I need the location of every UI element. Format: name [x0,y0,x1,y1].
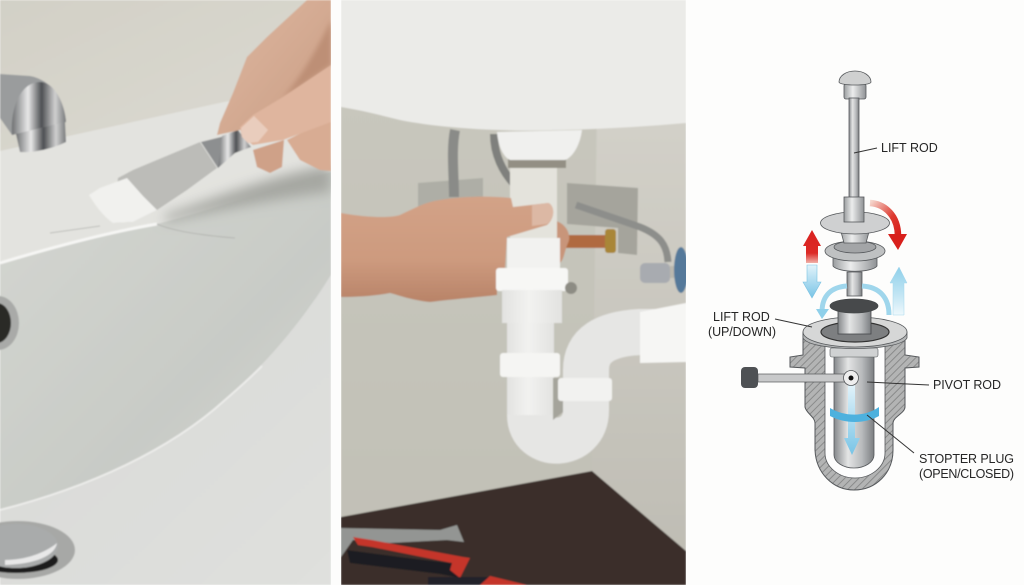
icon: white filler on blade [89,178,157,223]
S trap bend [530,332,686,441]
icon: knife bolster [200,136,222,168]
label: pivot rod: PIVOT ROD [933,378,1001,392]
label: lift rod up/down: LIFT ROD [713,310,770,324]
pivot rod leader [867,382,929,385]
counter top [0,102,330,262]
copper pipe [560,235,608,248]
stopper plug leader [867,415,914,453]
braided supply hose two [494,134,514,184]
panel: pop-up stopper diagram [708,71,1014,490]
tail pipe [510,165,557,245]
shutoff valve [640,247,688,293]
icon: pop-up drain [0,521,75,579]
arrow: red rotation [870,203,907,250]
arrow: blue down [803,265,821,298]
collar [507,238,560,270]
tools on cabinet floor [341,525,527,585]
arrow: blue flow arcs [816,286,889,319]
icon: stopper head assembly [820,197,890,296]
upper slip nut [496,268,568,291]
icon: pivot rod [741,367,858,388]
shadow of hand on sink [165,165,331,222]
panel: sink crack repair photo [0,0,331,585]
icon: overflow hole [0,296,19,350]
label: lift rod up/down: (UP/DOWN) [708,325,776,339]
right mounting bracket [567,183,638,255]
icon: stopper top cap [830,299,878,334]
lower sink rim [0,275,331,585]
label: stopper plug [919,452,1014,481]
arrow: red up [803,230,821,263]
basin bowl [0,172,331,510]
upper body [502,290,562,323]
plug shoulder [830,348,878,357]
icon: lift rod shaft [849,98,859,200]
side wall right [592,100,686,552]
icon: putty knife blade [117,142,217,210]
brass fitting [605,229,616,253]
icon: chrome faucet [0,74,66,152]
braided supply hose three [576,205,668,262]
wall behind sink [0,0,306,152]
lift rod up/down leader [775,319,812,327]
icon: blue seal band [830,407,879,422]
lift rod leader [854,148,877,153]
arm coupling [640,303,686,363]
hand gripping pipe [341,197,553,302]
label: stopper plug: (OPEN/CLOSED) [919,467,1014,481]
hand holding the knife [217,0,331,173]
icon: stopper plug [834,352,874,468]
icon: lift rod knob [839,71,871,99]
rim highlights [0,224,157,263]
drain silver ring [508,157,566,168]
arrow: blue up [890,267,907,315]
trap gap shadow [553,378,563,420]
middle slip nut [500,353,560,377]
sink bowl underside [341,0,686,131]
braided hoses [453,130,455,197]
label: lift rod up/down [708,310,776,339]
icon: top flange [803,317,907,348]
trap slip nut [558,378,612,401]
white vertical pipe [506,322,554,414]
left mounting bracket [418,178,483,207]
wall screw [565,282,577,294]
dark cabinet floor [341,471,686,585]
drain flange [497,130,582,160]
icon: knife handle [218,130,251,168]
panel: under-sink plumbing photo [341,0,688,585]
icon: drain body cross-section [790,333,919,490]
label: stopper plug: STOPTER PLUG [919,452,1014,466]
fingers behind pipe [556,221,570,262]
label: lift rod: LIFT ROD [881,141,938,155]
arrow: blue flow through plug [844,385,860,455]
crack lines [50,224,235,238]
drain body cavity [825,345,885,478]
back wall [341,106,598,518]
